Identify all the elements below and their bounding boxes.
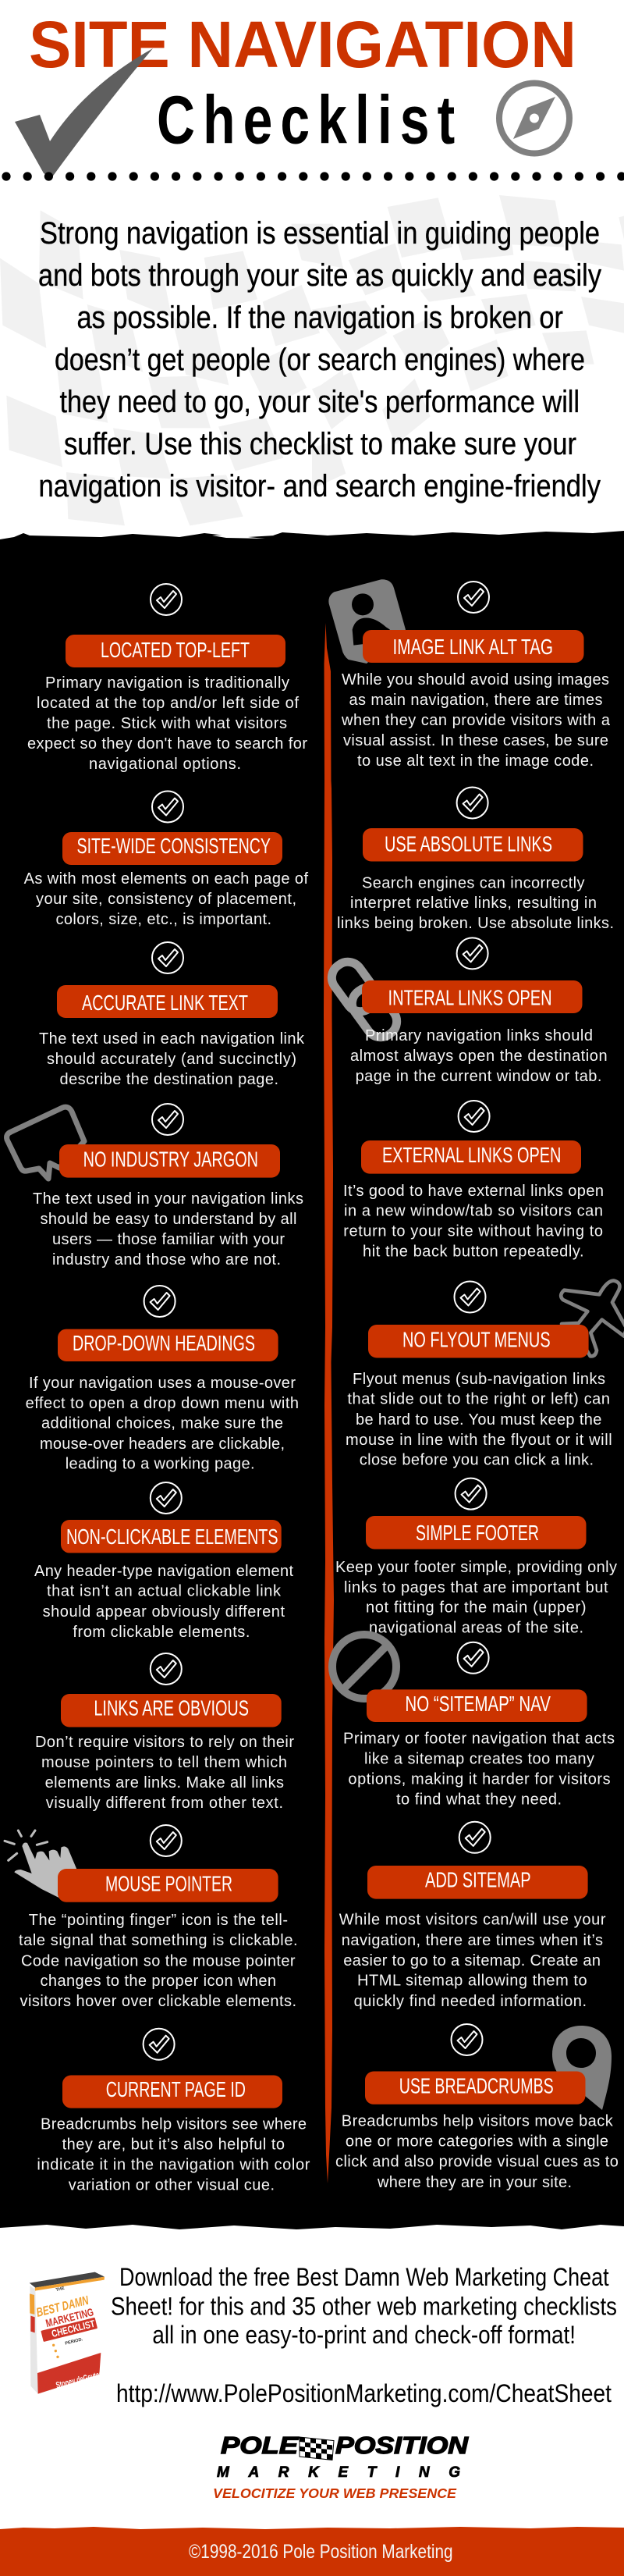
body text: where they are in your site. (377, 2174, 572, 2191)
body text: located at the top and/or left side of (37, 695, 299, 712)
item: no sitemap nav (332, 1635, 615, 1808)
check icon (457, 938, 488, 969)
body text: describe the destination page. (59, 1071, 278, 1088)
icon: airplane (561, 1281, 624, 1356)
item: no industry jargon (7, 1104, 303, 1268)
body text: As with most elements on each page of (24, 870, 308, 888)
body text: as main navigation, there are times (349, 692, 602, 709)
body text: expect so they don't have to search for (27, 735, 307, 753)
download call to action (111, 2263, 617, 2407)
body text: While most visitors can/will use your (339, 1912, 606, 1929)
heading pill (62, 832, 282, 865)
book cover image: BEST DAMN (35, 2294, 90, 2320)
body text (346, 1371, 612, 1469)
heading pill (61, 1520, 282, 1553)
body text: links being broken. Use absolute links. (337, 915, 614, 932)
heading pill: LINKS ARE OBVIOUS (94, 1696, 249, 1720)
body text (33, 1190, 303, 1268)
body text: tale signal that something is clickable. (19, 1932, 298, 1949)
body text: changes to the proper icon when (41, 1973, 276, 1990)
body text: when they can provide visitors with a (341, 712, 611, 729)
check icon (151, 1482, 182, 1514)
body text: in a new window/tab so visitors can (344, 1202, 603, 1219)
check icon (454, 1282, 485, 1313)
heading pill (362, 980, 582, 1013)
heading pill (367, 1689, 587, 1722)
item: use breadcrumbs (335, 2024, 619, 2191)
icon: portrait image (328, 579, 406, 664)
body text: easier to go to a sitemap. Create an (343, 1952, 601, 1969)
body text: Code navigation so the mouse pointer (21, 1952, 296, 1969)
body text: should be easy to understand by all (41, 1211, 296, 1228)
heading pill (368, 1325, 589, 1358)
book cover image: CHECKLIST (51, 2318, 96, 2339)
body text: mouse in line with the flyout or it will (346, 1432, 612, 1449)
heading pill: MOUSE POINTER (105, 1872, 232, 1896)
body text: mouse pointers to tell them which (41, 1754, 287, 1771)
header: title block (15, 8, 576, 178)
heading pill (365, 2072, 585, 2105)
footer band (0, 2527, 624, 2576)
body text: quickly find needed information. (354, 1993, 587, 2010)
check icon (459, 1822, 491, 1853)
heading pill: NO FLYOUT MENUS (402, 1327, 551, 1351)
book cover image: PERIOD. (65, 2337, 83, 2347)
body text: that slide out to the right or left) can (347, 1391, 610, 1408)
heading pill: INTERAL LINKS OPEN (388, 985, 552, 1010)
body text (337, 874, 614, 932)
heading pill (58, 1869, 278, 1902)
body text (27, 674, 307, 773)
body text (26, 1375, 299, 1473)
body text: colors, size, etc., is important. (56, 911, 271, 928)
torn edge white sliver (212, 534, 275, 539)
heading pill: NON-CLICKABLE ELEMENTS (66, 1525, 278, 1549)
heading pill: NO “SITEMAP” NAV (405, 1692, 551, 1716)
body text: interpret relative links, resulting in (350, 895, 597, 912)
body text: one or more categories with a single (346, 2133, 608, 2151)
heading pill: IMAGE LINK ALT TAG (393, 635, 553, 659)
heading pill (59, 1144, 280, 1178)
check icon (451, 2024, 482, 2055)
heading pill (62, 2075, 282, 2108)
body text: to use alt text in the image code. (357, 753, 594, 770)
item: external links open (343, 1101, 604, 1261)
title: site navigation: SITE NAVIGATION (29, 8, 576, 81)
check icon (151, 1825, 182, 1856)
body text (24, 870, 308, 928)
body text: like a sitemap creates too many (364, 1751, 594, 1768)
body text: Primary navigation is traditionally (45, 674, 289, 692)
background: checkered flag (0, 195, 624, 525)
body text (19, 1912, 298, 2010)
logo: pole position marketing: MARKETING (217, 2464, 460, 2481)
item: use absolute links (337, 787, 614, 932)
item: drop-down headings (26, 1286, 299, 1473)
check icon (457, 787, 488, 818)
body text: HTML sitemap allowing them to (357, 1973, 587, 1990)
icon: prohibited sign (332, 1635, 396, 1699)
icon: large check mark (15, 48, 153, 178)
logo flag (300, 2437, 334, 2460)
body text: If your navigation uses a mouse-over (29, 1375, 296, 1392)
body text: Any header-type navigation element (34, 1563, 293, 1580)
icon: compass (499, 83, 569, 153)
body text: The “pointing finger” icon is the tell- (29, 1912, 288, 1929)
body text: they are, but it’s also helpful to (62, 2136, 285, 2153)
body text: The text used in your navigation links (33, 1190, 303, 1208)
body text: should accurately (and succinctly) (47, 1051, 296, 1068)
body text: the page. Stick with what visitors (47, 715, 287, 732)
logo: pole position marketing: VELOCITIZE YOUR WEB PRESENCE (213, 2485, 457, 2501)
check icon (144, 1286, 176, 1317)
body text: that isn’t an actual clickable link (47, 1583, 282, 1600)
body text: Primary navigation links should (365, 1027, 593, 1044)
heading pill: DROP-DOWN HEADINGS (73, 1331, 255, 1355)
item: add sitemap (339, 1822, 606, 2010)
body text: variation or other visual cue. (69, 2177, 275, 2194)
body text: navigational options. (89, 756, 241, 773)
logo: pole position marketing (213, 2432, 469, 2501)
check icon (458, 1642, 489, 1674)
body text: should appear obviously different (43, 1603, 285, 1621)
heading pill: SITE-WIDE CONSISTENCY (76, 834, 271, 858)
body text (34, 1563, 293, 1641)
body text: navigation, there are times when it’s (342, 1932, 603, 1949)
body text: The text used in each navigation link (39, 1030, 305, 1048)
body text: While you should avoid using images (342, 671, 609, 688)
body text: visual assist. In these cases, be sure (343, 732, 608, 749)
item: site-wide consistency (24, 792, 308, 928)
item: internal links open (326, 938, 608, 1085)
body text: Keep your footer simple, providing only (335, 1559, 617, 1576)
body text: options, making it harder for visitors (348, 1770, 611, 1788)
heading pill: USE ABSOLUTE LINKS (385, 832, 552, 856)
body text (343, 1183, 604, 1261)
item: mouse pointer (5, 1825, 298, 2010)
heading pill (366, 1516, 587, 1549)
book cover image: Stoney deGeyter (55, 2370, 103, 2390)
heading pill (367, 1866, 588, 1899)
item: simple footer (335, 1478, 617, 1636)
heading pill (58, 1329, 278, 1361)
body text (39, 1030, 305, 1088)
item: located top-left (27, 584, 307, 773)
heading pill (363, 630, 583, 663)
body text: page in the current window or tab. (356, 1068, 601, 1085)
body text: close before you can click a link. (360, 1452, 594, 1469)
body text (341, 671, 611, 770)
check icon (151, 1653, 182, 1685)
dotted divider (2, 172, 624, 181)
body text: Search engines can incorrectly (362, 874, 585, 891)
body text: users — those familiar with your (52, 1231, 285, 1248)
body text: your site, consistency of placement, (36, 891, 296, 908)
body text (335, 2112, 619, 2191)
title: checklist: Checklist (157, 81, 455, 158)
icon: location pin (552, 2026, 612, 2110)
body text (35, 1734, 294, 1812)
body text: Breadcrumbs help visitors move back (342, 2112, 614, 2129)
heading pill (361, 1140, 581, 1174)
body text: visually different from other text. (46, 1795, 283, 1812)
heading pill: USE BREADCRUMBS (399, 2074, 554, 2098)
body text (37, 2115, 310, 2194)
body text: not fitting for the main (upper) (366, 1599, 587, 1617)
body text (350, 1027, 608, 1085)
logo: pole position marketing: POLE (221, 2432, 300, 2459)
body text: leading to a working page. (66, 1456, 254, 1473)
item: image link alt tag (328, 579, 611, 770)
item: no flyout menus (346, 1281, 624, 1469)
body text: mouse-over headers are clickable, (40, 1436, 285, 1453)
heading pill: SIMPLE FOOTER (416, 1521, 539, 1545)
heading pill: NO INDUSTRY JARGON (83, 1147, 258, 1171)
body text: Flyout menus (sub-navigation links (353, 1371, 605, 1388)
heading pill: CURRENT PAGE ID (106, 2077, 246, 2101)
item: current page id (37, 2029, 310, 2194)
body text: from clickable elements. (73, 1624, 250, 1641)
body text: It’s good to have external links open (343, 1183, 604, 1200)
body text (339, 1912, 606, 2010)
body text: be hard to use. You must keep the (356, 1411, 601, 1429)
check icon (456, 1478, 487, 1510)
book cover image: MARKETING (44, 2305, 95, 2329)
logo: pole position marketing: POSITION (335, 2432, 469, 2459)
body text: elements are links. Make all links (45, 1774, 284, 1791)
body text: Don’t require visitors to rely on their (35, 1734, 294, 1751)
body text (335, 1559, 617, 1636)
check icon (152, 792, 183, 823)
heading pill (66, 635, 285, 667)
heading pill (57, 985, 278, 1018)
check icon (459, 1101, 490, 1132)
body text: Breadcrumbs help visitors see where (41, 2115, 307, 2133)
book cover image (30, 2272, 110, 2394)
body text: effect to open a drop down menu with (26, 1395, 299, 1412)
body text: visitors hover over clickable elements. (20, 1993, 296, 2010)
body text: return to your site without having to (343, 1223, 603, 1240)
item: accurate link text (39, 942, 305, 1088)
icon: speech bubble (7, 1107, 84, 1179)
panel: black checklist background with torn edges (0, 531, 624, 2229)
heading pill (363, 828, 583, 862)
body text: click and also provide visual cues as to (335, 2154, 619, 2171)
body text: Primary or footer navigation that acts (343, 1731, 615, 1748)
check icon (152, 942, 183, 973)
body text: hit the back button repeatedly. (363, 1244, 583, 1261)
body text: almost always open the destination (350, 1048, 608, 1065)
body text: industry and those who are not. (52, 1251, 281, 1268)
item: non-clickable elements (34, 1482, 293, 1641)
item: links are obvious (35, 1653, 294, 1812)
body text: navigational areas of the site. (369, 1619, 583, 1636)
heading pill: ACCURATE LINK TEXT (82, 991, 248, 1015)
body text: additional choices, make sure the (41, 1414, 283, 1432)
icon: chain links (326, 956, 402, 1043)
body text: to find what they need. (396, 1791, 562, 1808)
check icon (144, 2029, 175, 2060)
body text: links to pages that are important but (344, 1579, 608, 1596)
center divider (324, 623, 334, 2183)
icon: clicking hand (5, 1831, 78, 1898)
body text (343, 1731, 615, 1808)
body text: indicate it in the navigation with color (37, 2157, 310, 2174)
check icon (458, 582, 489, 613)
heading pill (61, 1694, 282, 1727)
check icon (151, 584, 182, 615)
footer copyright: ©1998-2016 Pole Position Marketing (189, 2541, 453, 2563)
intro text: as possible. If the navigation is broken or (76, 301, 563, 335)
heading pill: LOCATED TOP-LEFT (101, 638, 250, 662)
book cover image: THE (55, 2286, 66, 2293)
heading pill: ADD SITEMAP (425, 1868, 531, 1892)
check icon (152, 1104, 183, 1135)
intro text (38, 216, 601, 503)
